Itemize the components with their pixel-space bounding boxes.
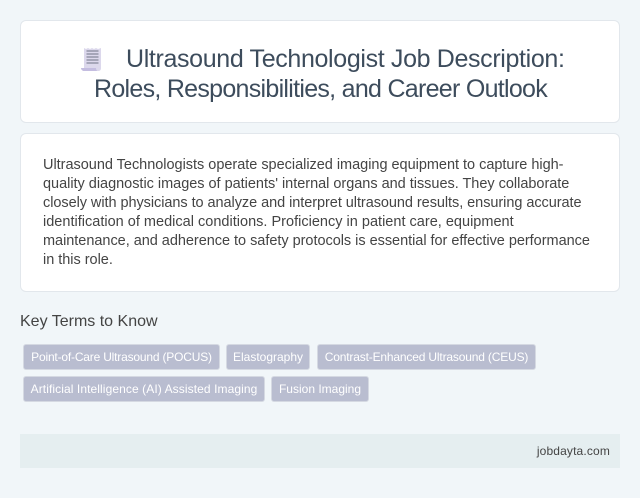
tag: CEUS [317,344,536,370]
tag: elastography: Elastography [233,350,303,364]
description text: identification of medical conditions. Proficiency in patient care, equipment [43,214,514,230]
title text: Roles, Responsibilities, and Career Outlook [94,75,547,103]
tag: fusion imaging: Fusion Imaging [279,382,361,396]
tag list [23,344,536,402]
footer bar [20,434,620,468]
footer source: jobdayta.com [537,444,610,458]
description text: quality diagnostic images of patients' internal organs and tissues. They collaborate [43,176,569,192]
heading: key terms: Key Terms to Know [20,313,158,330]
icon: report document [81,48,101,71]
title text: Ultrasound Technologist Job Description: [126,45,565,73]
description text: maintenance, and adherence to safety protocols is essential for effective performance [43,233,590,249]
description text: closely with physicians to analyze and interpret ultrasound results, ensuring accurate [43,195,582,211]
tag: fusion imaging [271,376,369,402]
description text: Ultrasound Technologists operate specialized imaging equipment to capture high- [43,157,563,173]
title panel [20,20,620,123]
title text [94,45,565,103]
description panel [20,133,620,292]
description text: in this role. [43,252,113,268]
tag: AI imaging [23,376,265,402]
tag: POCUS: Point-of-Care Ultrasound (POCUS) [31,350,212,364]
tag: AI imaging: Artificial Intelligence (AI) Assisted Imaging [31,382,257,396]
tag: POCUS [23,344,220,370]
description text [43,157,590,268]
tag: CEUS: Contrast-Enhanced Ultrasound (CEUS) [325,350,528,364]
tag: elastography [226,344,310,370]
